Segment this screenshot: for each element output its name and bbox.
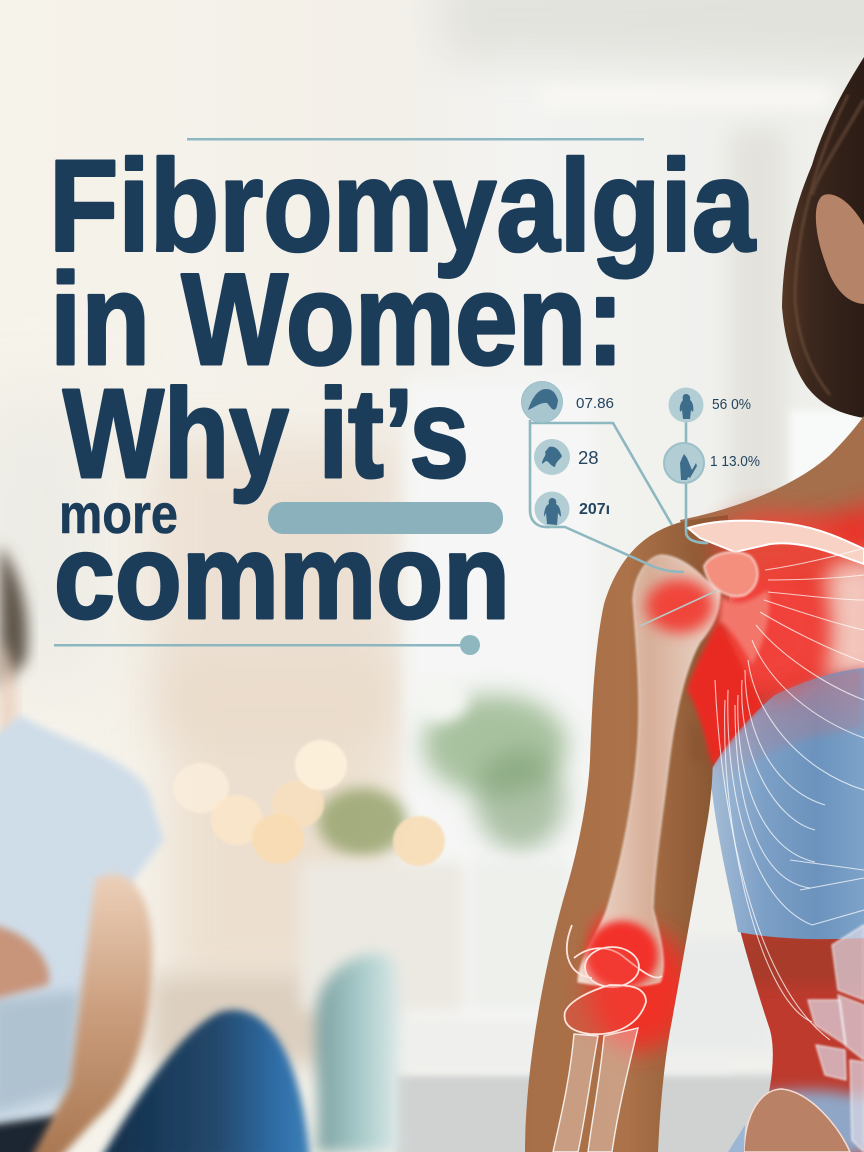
title line: Fibromyalgia: Fibromyalgia xyxy=(49,132,756,278)
title line: more: more xyxy=(59,482,178,545)
title line: common: common xyxy=(54,510,510,644)
translucent scapula and collarbone xyxy=(688,521,864,665)
icon: figure xyxy=(668,388,704,422)
connector lines xyxy=(530,420,708,572)
stat: 28 xyxy=(534,439,599,475)
waistband xyxy=(728,1125,745,1152)
blurred teal chair xyxy=(316,954,400,1152)
woman: blue top xyxy=(710,668,864,939)
forearm bones xyxy=(553,1028,638,1152)
spine and ribs xyxy=(808,925,864,1152)
icon: figure xyxy=(534,439,570,475)
title line: Why it's: Why it’s xyxy=(63,363,469,504)
icon: figure xyxy=(534,492,570,526)
woman: arm xyxy=(525,515,730,1152)
value: 1 13.0% xyxy=(710,454,760,470)
value: 56 0% xyxy=(712,397,751,413)
bokeh lights xyxy=(173,740,445,866)
icon: figure xyxy=(664,443,704,483)
stat: 207 xyxy=(534,492,610,526)
hip xyxy=(744,1089,850,1152)
woman: ear xyxy=(816,194,864,304)
icon: body part xyxy=(522,382,562,422)
woman: torso xyxy=(700,500,864,1152)
stat: 07.86 xyxy=(522,382,614,422)
title xyxy=(49,132,756,644)
blurred seated person xyxy=(0,545,310,1152)
translucent humerus bone xyxy=(578,555,720,989)
elbow joint bones xyxy=(565,925,662,1034)
value: 07.86 xyxy=(576,396,614,412)
stat: 56 0% xyxy=(668,388,751,422)
value: 207ı xyxy=(579,501,610,518)
title line: in Women: in Women: xyxy=(50,246,624,392)
bottom rule with dot xyxy=(54,635,480,655)
top rule xyxy=(187,138,644,140)
value: 28 xyxy=(578,447,599,468)
stat: 1 13.0% xyxy=(664,443,760,483)
woman: neck and shoulder xyxy=(680,416,864,640)
elbow inflammation glow xyxy=(588,910,692,1052)
woman: hair xyxy=(782,57,864,418)
highlight pill xyxy=(268,502,503,534)
shoulder inflammation glow xyxy=(687,511,837,765)
blurred plants and pots xyxy=(300,678,570,1012)
chest nerve fibres xyxy=(715,548,864,1040)
